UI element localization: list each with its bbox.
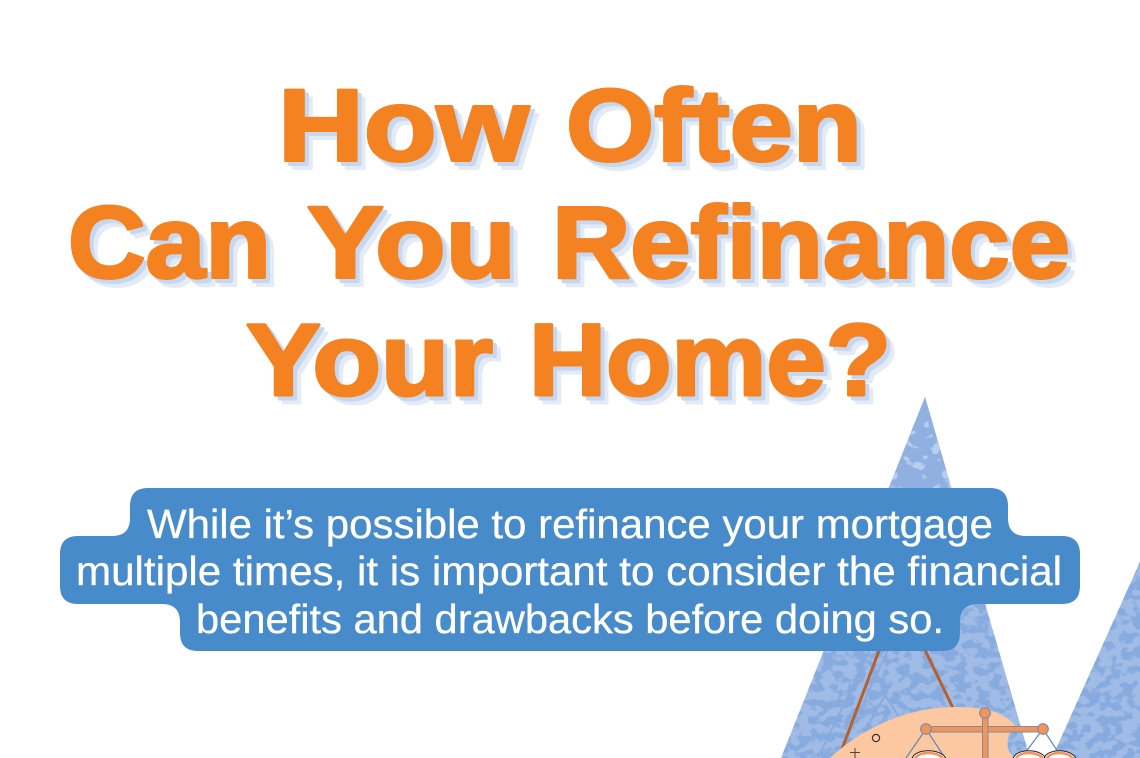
mountains: textured blue triangles: [770, 395, 1140, 758]
intro callout: [60, 488, 1080, 651]
title: Often: [566, 68, 862, 182]
intro callout: While it’s possible to refinance your mortgage: [147, 501, 993, 547]
intro callout: multiple times, it is important to consider the financial: [76, 548, 1062, 594]
hanging cords: [842, 648, 953, 749]
title: Your: [246, 303, 493, 417]
title: [68, 68, 1070, 417]
small decorative circle and cross: [850, 734, 880, 758]
title: Home?: [529, 303, 891, 417]
title: Can: [68, 186, 271, 300]
intro callout: benefits and drawbacks before doing so.: [196, 596, 944, 642]
title: You: [307, 186, 516, 300]
title: How: [278, 68, 530, 182]
peach blob: [830, 707, 1016, 758]
icon: balance scale: [906, 708, 1076, 758]
title: Refinance: [552, 186, 1070, 300]
